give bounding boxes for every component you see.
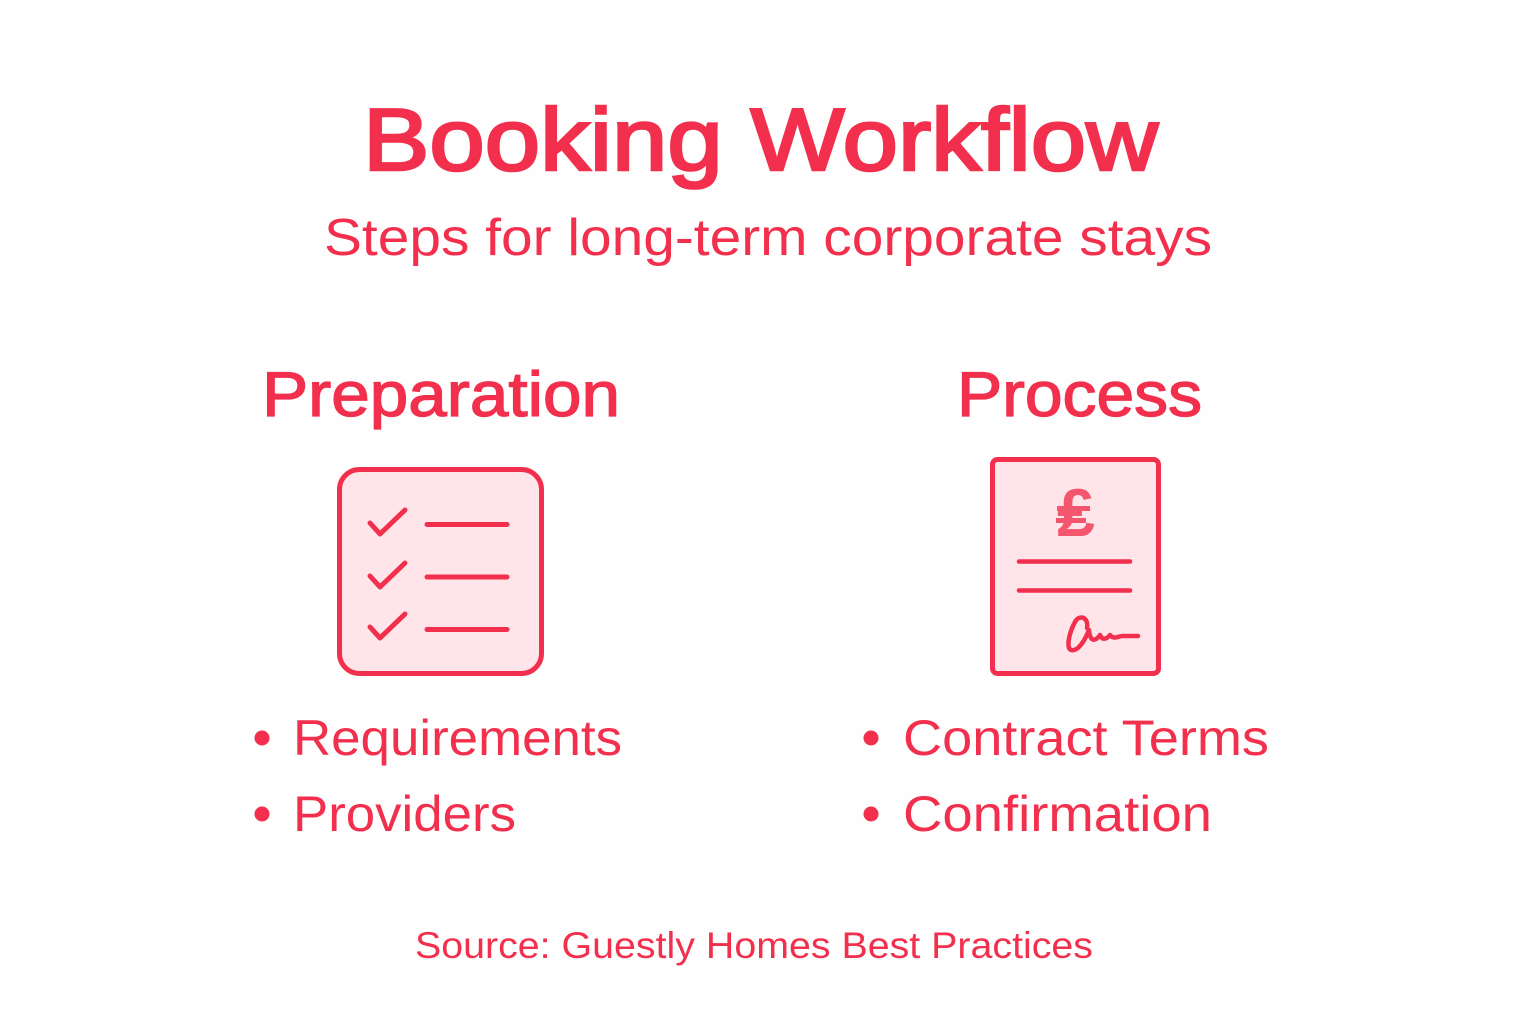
panel: preparation bbox=[254, 360, 622, 842]
heading: preparation: Preparation bbox=[262, 360, 620, 430]
list: process items bbox=[864, 710, 1269, 842]
source note: Source: Guestly Homes Best Practices bbox=[415, 925, 1093, 966]
list: preparation items: Providers bbox=[293, 786, 516, 842]
heading: process: Process bbox=[957, 360, 1202, 430]
title: Booking Workflow bbox=[363, 90, 1159, 189]
list: process items: Contract Terms bbox=[903, 710, 1269, 766]
panel: process bbox=[864, 360, 1269, 842]
icon: signed contract bbox=[992, 460, 1158, 674]
list: preparation items bbox=[254, 710, 622, 842]
list: preparation items: Requirements bbox=[293, 710, 622, 766]
subtitle: Steps for long-term corporate stays bbox=[324, 209, 1212, 267]
list: process items: Confirmation bbox=[903, 786, 1212, 842]
icon: signed contract: £ bbox=[1057, 475, 1095, 551]
icon: checklist bbox=[340, 470, 542, 674]
